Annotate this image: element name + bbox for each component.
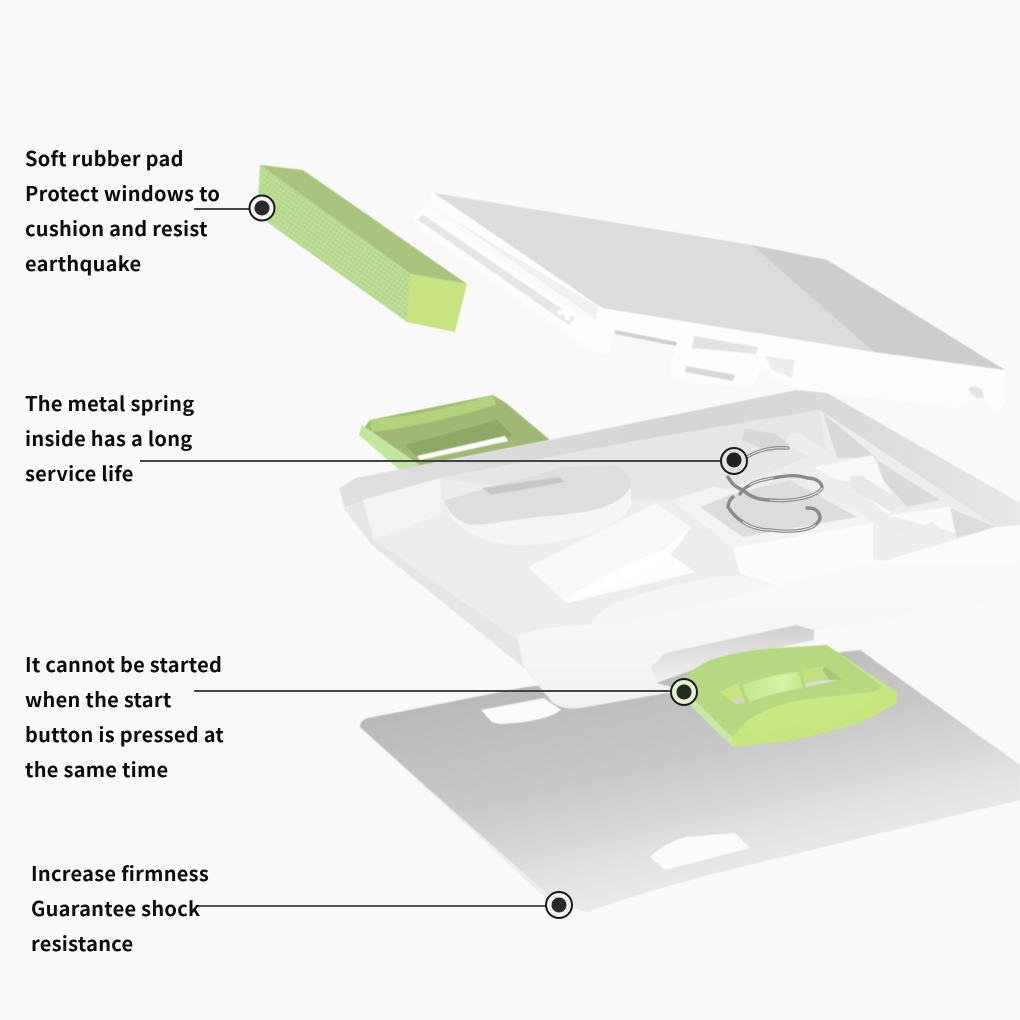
text: rubber pad: cushion and resist [25, 213, 208, 242]
oval ramp [590, 576, 780, 630]
callout: metal spring [140, 448, 747, 474]
bottom plate [360, 650, 1020, 912]
spring seat [671, 487, 873, 583]
text: firmness: resistance [31, 928, 133, 957]
text: rubber pad: Soft rubber pad [25, 143, 184, 172]
text: metal spring: service life [25, 458, 134, 487]
middle housing [339, 390, 1020, 708]
metal spring [728, 448, 822, 531]
callout: start button [194, 679, 697, 705]
text: firmness: Increase firmness [31, 858, 209, 887]
boss [444, 465, 631, 545]
lower green clip [683, 645, 897, 747]
tab [528, 503, 691, 600]
text: metal spring: inside has a long [25, 423, 193, 452]
text: start button: the same time [25, 754, 168, 783]
upper green clip [359, 395, 550, 470]
text: start button: when the start [25, 684, 172, 713]
text: firmness: Guarantee shock [31, 893, 200, 922]
callout: rubber pad [194, 196, 274, 220]
tab opening [568, 550, 695, 603]
text: metal spring: The metal spring [25, 388, 194, 417]
right compartments [823, 413, 877, 458]
callout: firmness [198, 892, 572, 918]
rubber pad [258, 165, 467, 332]
front slot [651, 625, 814, 683]
front lip [517, 525, 1020, 708]
top cover [412, 193, 1005, 412]
text: rubber pad: earthquake [25, 248, 141, 277]
text: start button: button is pressed at [25, 719, 224, 748]
text: rubber pad: Protect windows to [25, 178, 220, 207]
text: start button: It cannot be started [25, 649, 222, 678]
